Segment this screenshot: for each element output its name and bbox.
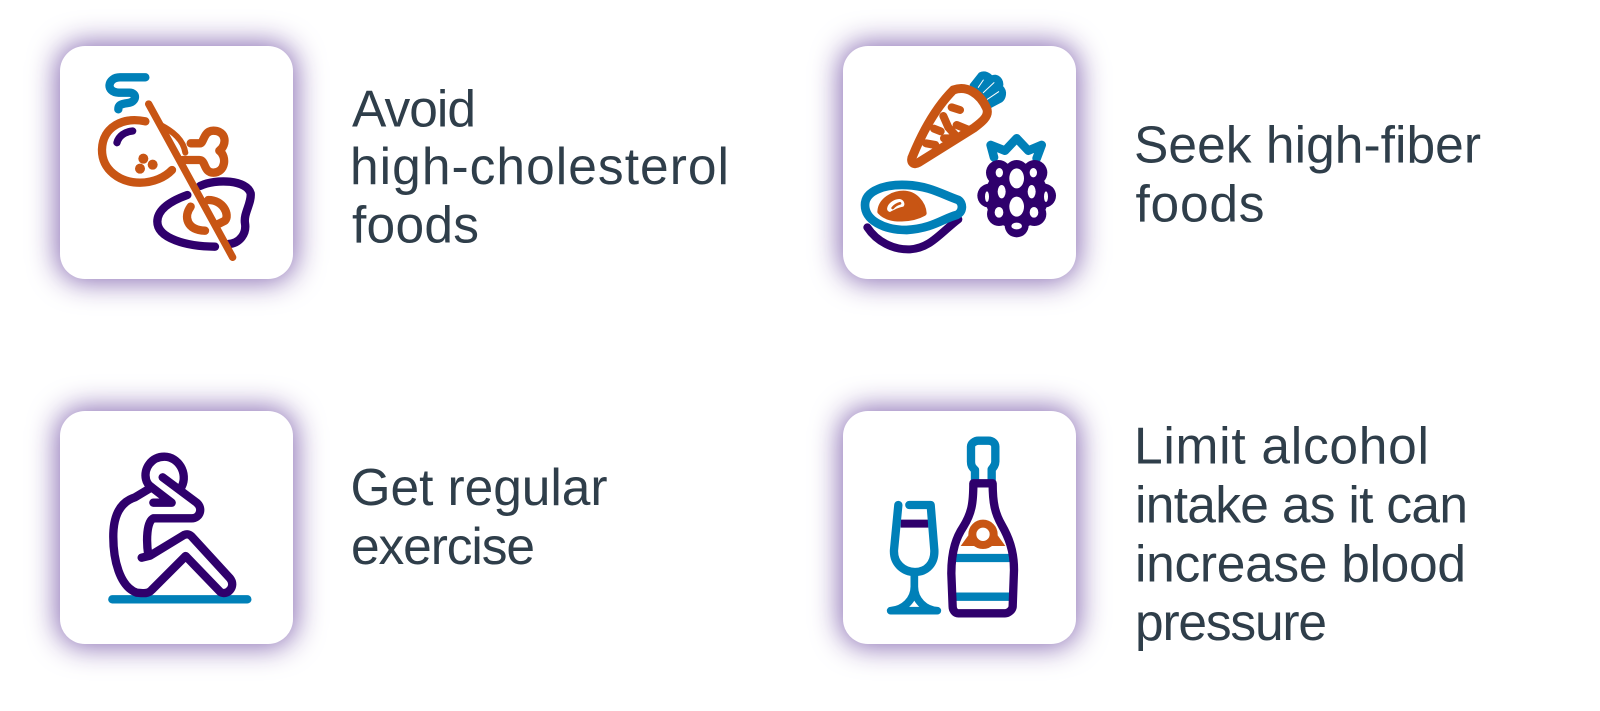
raspberry body: [977, 160, 1056, 237]
text: get regular exercise: exercise: [351, 517, 535, 575]
icon card: carrot, avocado and raspberry: [843, 46, 1076, 279]
text: avoid high-cholesterol foods: [350, 80, 729, 254]
panel: avoid high-cholesterol foods: [36, 22, 729, 304]
text: seek high-fiber foods: foods: [1135, 175, 1264, 233]
text: avoid high-cholesterol foods: foods: [352, 196, 479, 254]
panel: seek high-fiber foods: [818, 22, 1481, 304]
text: get regular exercise: Get regular: [350, 458, 608, 516]
text: seek high-fiber foods: Seek high-fiber: [1134, 116, 1481, 174]
text: get regular exercise: [350, 458, 608, 575]
icon card: chicken and egg crossed out: [60, 46, 292, 279]
text: seek high-fiber foods: [1134, 116, 1481, 233]
panel: limit alcohol intake: [818, 386, 1468, 668]
text: limit alcohol intake as it can increase blood pressure: [1134, 416, 1468, 651]
text: avoid high-cholesterol foods: high-cholesterol: [350, 137, 729, 195]
text: limit alcohol intake as it can increase blood pressure: pressure: [1135, 593, 1327, 651]
icon card: person doing sit-ups: [60, 411, 292, 644]
icon card: wine glass and bottle: [843, 411, 1076, 644]
panel: get regular exercise: [36, 386, 608, 668]
text: limit alcohol intake as it can increase blood pressure: Limit alcohol: [1134, 416, 1429, 474]
text: limit alcohol intake as it can increase blood pressure: increase blood: [1135, 535, 1466, 593]
text: limit alcohol intake as it can increase blood pressure: intake as it can: [1135, 476, 1468, 534]
text: avoid high-cholesterol foods: Avoid: [352, 80, 476, 138]
